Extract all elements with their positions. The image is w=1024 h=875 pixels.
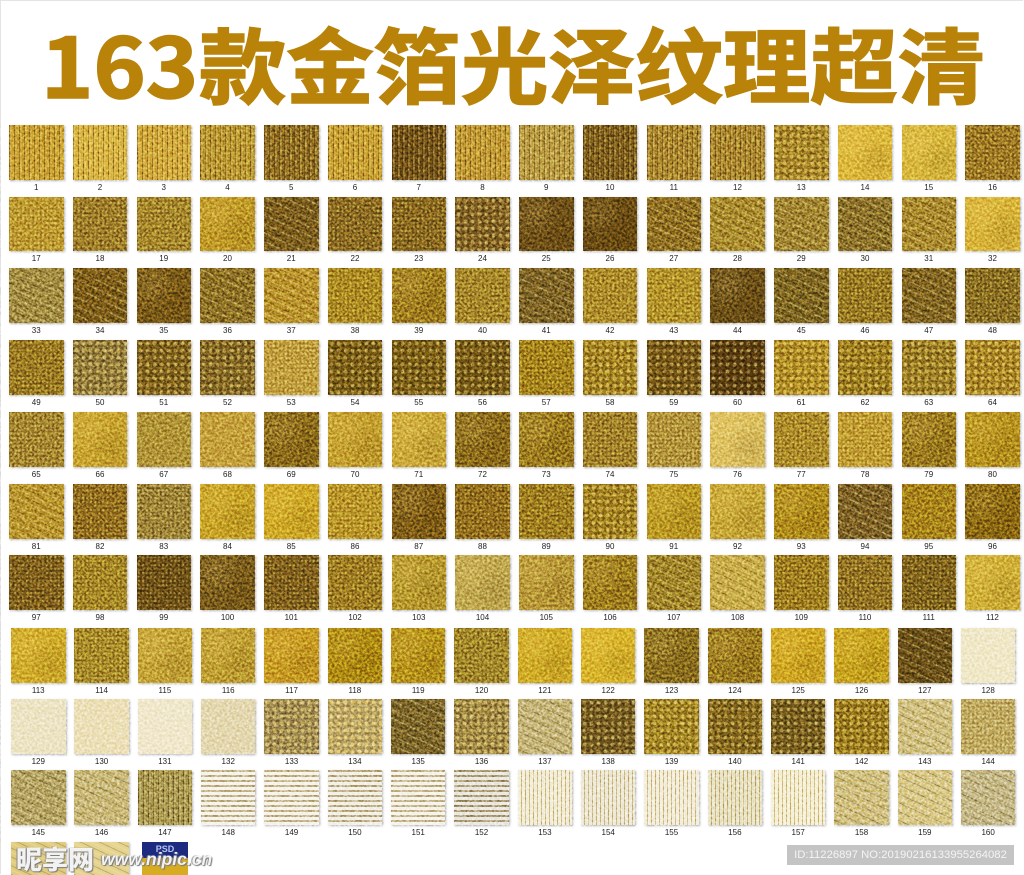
texture row 1: 14 xyxy=(861,182,869,192)
PSD cover thumbnail xyxy=(142,842,188,875)
texture row 1: 15 xyxy=(924,182,933,192)
texture row 9: 143 xyxy=(918,756,932,766)
texture row 2: 25 xyxy=(542,254,551,263)
texture row 2: 30 xyxy=(861,254,869,263)
texture row 8: 127 xyxy=(918,686,932,694)
texture row 5: 66 xyxy=(96,470,104,478)
texture row 2: 23 xyxy=(414,254,423,263)
texture row 2: 19 xyxy=(159,254,168,263)
texture row 3: 35 xyxy=(159,326,168,334)
texture row 6: 84 xyxy=(223,542,232,550)
texture row 5: 72 xyxy=(478,470,487,478)
texture row 2: 17 xyxy=(32,254,41,263)
texture row 10: 154 xyxy=(602,828,615,836)
texture row 3: 46 xyxy=(861,326,869,334)
texture row 6: 86 xyxy=(351,542,359,550)
texture row 2 xyxy=(8,196,1022,263)
texture row 1: 10 xyxy=(606,182,614,192)
PSD cover thumbnail: PSD xyxy=(156,844,174,854)
texture row 7: 100 xyxy=(221,612,234,622)
texture row 2: 27 xyxy=(669,254,678,263)
texture row 10 xyxy=(10,770,1018,836)
texture row 2: 31 xyxy=(924,254,933,263)
texture row 3: 38 xyxy=(351,326,359,334)
texture row 9: 131 xyxy=(158,756,172,766)
texture row 3: 34 xyxy=(96,326,104,334)
texture row 8: 123 xyxy=(665,686,678,694)
image ID bar xyxy=(787,845,1014,865)
texture row 5: 77 xyxy=(797,470,806,478)
texture row 10: 160 xyxy=(981,828,995,836)
texture row 8: 121 xyxy=(538,686,552,694)
texture row 5 xyxy=(8,412,1022,478)
texture row 9: 142 xyxy=(855,756,868,766)
texture row 8: 126 xyxy=(855,686,868,694)
texture row 11 xyxy=(11,842,131,875)
texture row 3: 41 xyxy=(542,326,551,334)
texture row 10: 158 xyxy=(855,828,868,836)
texture row 10: 155 xyxy=(665,828,678,836)
texture row 1: 4 xyxy=(225,182,230,192)
texture row 1: 13 xyxy=(797,182,806,192)
texture row 2: 22 xyxy=(351,254,359,263)
texture row 10: 147 xyxy=(158,828,172,836)
texture row 1: 16 xyxy=(988,182,997,192)
texture row 10: 153 xyxy=(538,828,552,836)
texture row 5: 67 xyxy=(159,470,168,478)
texture row 7: 98 xyxy=(96,612,104,622)
texture row 8: 120 xyxy=(475,686,488,694)
texture row 7: 104 xyxy=(476,612,489,622)
texture row 6: 85 xyxy=(287,542,296,550)
texture row 6: 88 xyxy=(478,542,487,550)
texture row 9: 144 xyxy=(981,756,995,766)
texture row 6: 91 xyxy=(669,542,678,550)
texture row 4: 52 xyxy=(223,398,232,406)
texture row 1: 6 xyxy=(353,182,357,192)
texture row 2: 26 xyxy=(606,254,614,263)
texture row 1: 8 xyxy=(480,182,485,192)
texture row 1 xyxy=(8,125,1022,192)
texture row 3: 36 xyxy=(223,326,232,334)
texture row 1: 7 xyxy=(417,182,421,192)
texture row 6: 96 xyxy=(988,542,997,550)
texture row 5: 68 xyxy=(223,470,232,478)
texture row 4: 61 xyxy=(797,398,806,406)
texture row 1: 12 xyxy=(733,182,742,192)
texture row 10: 151 xyxy=(412,828,425,836)
texture row 9: 139 xyxy=(665,756,678,766)
texture row 3: 39 xyxy=(414,326,423,334)
texture row 3: 47 xyxy=(924,326,933,334)
texture row 4: 53 xyxy=(287,398,296,406)
texture row 7: 105 xyxy=(540,612,553,622)
texture row 5: 79 xyxy=(924,470,933,478)
texture row 7: 111 xyxy=(923,612,935,622)
texture row 3: 42 xyxy=(606,326,614,334)
texture row 9: 135 xyxy=(412,756,425,766)
texture row 1: 1 xyxy=(34,182,38,192)
texture row 1: 2 xyxy=(98,182,102,192)
texture row 9: 137 xyxy=(538,756,552,766)
texture row 10: 156 xyxy=(728,828,742,836)
texture row 7: 97 xyxy=(32,612,41,622)
texture row 4: 50 xyxy=(96,398,104,406)
texture row 4: 56 xyxy=(478,398,487,406)
texture row 4: 51 xyxy=(159,398,168,406)
texture row 2: 18 xyxy=(96,254,104,263)
texture row 3: 37 xyxy=(287,326,296,334)
texture row 8: 114 xyxy=(95,686,108,694)
texture row 6: 92 xyxy=(733,542,742,550)
texture row 10: 146 xyxy=(95,828,108,836)
texture row 9: 129 xyxy=(32,756,45,766)
texture row 4: 58 xyxy=(606,398,614,406)
texture row 6 xyxy=(8,484,1022,550)
texture row 5: 74 xyxy=(606,470,614,478)
texture row 9: 140 xyxy=(728,756,742,766)
texture row 3: 43 xyxy=(669,326,678,334)
texture row 10: 149 xyxy=(285,828,298,836)
texture row 5: 75 xyxy=(669,470,678,478)
texture row 4: 59 xyxy=(669,398,678,406)
texture row 9: 141 xyxy=(792,756,805,766)
texture row 9: 138 xyxy=(602,756,615,766)
texture row 7: 107 xyxy=(667,612,680,622)
texture row 2: 32 xyxy=(988,254,997,263)
texture row 4: 49 xyxy=(32,398,41,406)
texture row 5: 73 xyxy=(542,470,551,478)
texture row 8: 113 xyxy=(32,686,45,694)
texture row 10: 148 xyxy=(222,828,235,836)
texture row 8 xyxy=(10,628,1018,694)
texture row 7: 110 xyxy=(859,612,871,622)
texture row 8: 119 xyxy=(412,686,425,694)
texture row 6: 83 xyxy=(159,542,168,550)
title: 款金箔光泽纹理超清 xyxy=(199,2,985,121)
texture row 2: 21 xyxy=(287,254,296,263)
texture row 6: 95 xyxy=(924,542,933,550)
texture row 6: 87 xyxy=(414,542,423,550)
texture row 9: 133 xyxy=(285,756,298,766)
texture row 5: 65 xyxy=(32,470,41,478)
texture row 6: 90 xyxy=(606,542,614,550)
texture row 2: 24 xyxy=(478,254,487,263)
texture row 5: 70 xyxy=(351,470,359,478)
texture row 9: 134 xyxy=(348,756,362,766)
texture row 5: 76 xyxy=(733,470,742,478)
texture row 8: 124 xyxy=(728,686,742,694)
texture row 7: 99 xyxy=(159,612,168,622)
texture row 8: 118 xyxy=(348,686,361,694)
texture row 2: 20 xyxy=(223,254,232,263)
texture row 9: 132 xyxy=(222,756,235,766)
texture row 10: 157 xyxy=(792,828,805,836)
texture row 8: 128 xyxy=(981,686,995,694)
image ID bar: ID:11226897 NO:20190216133955264082 xyxy=(794,849,1007,861)
texture row 1: 9 xyxy=(544,182,548,192)
texture row 7: 112 xyxy=(986,612,999,622)
texture row 4: 62 xyxy=(861,398,869,406)
texture row 7: 103 xyxy=(412,612,425,622)
texture row 3: 33 xyxy=(32,326,41,334)
texture row 9: 130 xyxy=(95,756,108,766)
texture row 5: 69 xyxy=(287,470,296,478)
texture row 6: 89 xyxy=(542,542,551,550)
texture row 4 xyxy=(8,340,1022,406)
texture row 6: 82 xyxy=(96,542,104,550)
texture row 2: 28 xyxy=(733,254,742,263)
texture row 8: 117 xyxy=(285,686,298,694)
texture row 6: 93 xyxy=(797,542,806,550)
texture row 7: 108 xyxy=(731,612,744,622)
texture row 8: 115 xyxy=(159,686,171,694)
texture row 4: 63 xyxy=(924,398,933,406)
texture row 4: 64 xyxy=(988,398,997,406)
texture row 8: 116 xyxy=(222,686,235,694)
texture row 1: 5 xyxy=(289,182,293,192)
texture row 3: 48 xyxy=(988,326,997,334)
texture row 7: 109 xyxy=(795,612,808,622)
texture row 4: 60 xyxy=(733,398,742,406)
texture row 4: 55 xyxy=(414,398,423,406)
texture row 8: 125 xyxy=(792,686,805,694)
texture row 7 xyxy=(8,554,1022,622)
texture row 10: 159 xyxy=(918,828,932,836)
texture row 7: 106 xyxy=(603,612,617,622)
texture row 5: 80 xyxy=(988,470,997,478)
texture row 6: 94 xyxy=(861,542,869,550)
texture row 4: 57 xyxy=(542,398,551,406)
texture row 9 xyxy=(10,698,1018,766)
texture row 9: 136 xyxy=(475,756,488,766)
texture row 1: 3 xyxy=(162,182,166,192)
watermark: www.nipic.cn xyxy=(101,849,212,869)
texture row 1: 11 xyxy=(670,182,678,192)
texture row 3: 44 xyxy=(733,326,742,334)
texture row 10: 152 xyxy=(475,828,488,836)
texture row 3: 40 xyxy=(478,326,487,334)
texture row 8: 122 xyxy=(602,686,615,694)
texture row 10: 145 xyxy=(32,828,45,836)
title: 163 xyxy=(41,2,198,122)
texture row 7: 102 xyxy=(348,612,362,622)
texture row 6: 81 xyxy=(32,542,41,550)
texture row 4: 54 xyxy=(351,398,359,406)
watermark xyxy=(16,840,213,875)
texture row 3: 45 xyxy=(797,326,806,334)
texture row 10: 150 xyxy=(348,828,362,836)
texture row 5: 78 xyxy=(861,470,869,478)
texture row 5: 71 xyxy=(414,470,423,478)
texture row 3 xyxy=(8,268,1022,334)
texture row 2: 29 xyxy=(797,254,806,263)
texture row 7: 101 xyxy=(285,612,298,622)
